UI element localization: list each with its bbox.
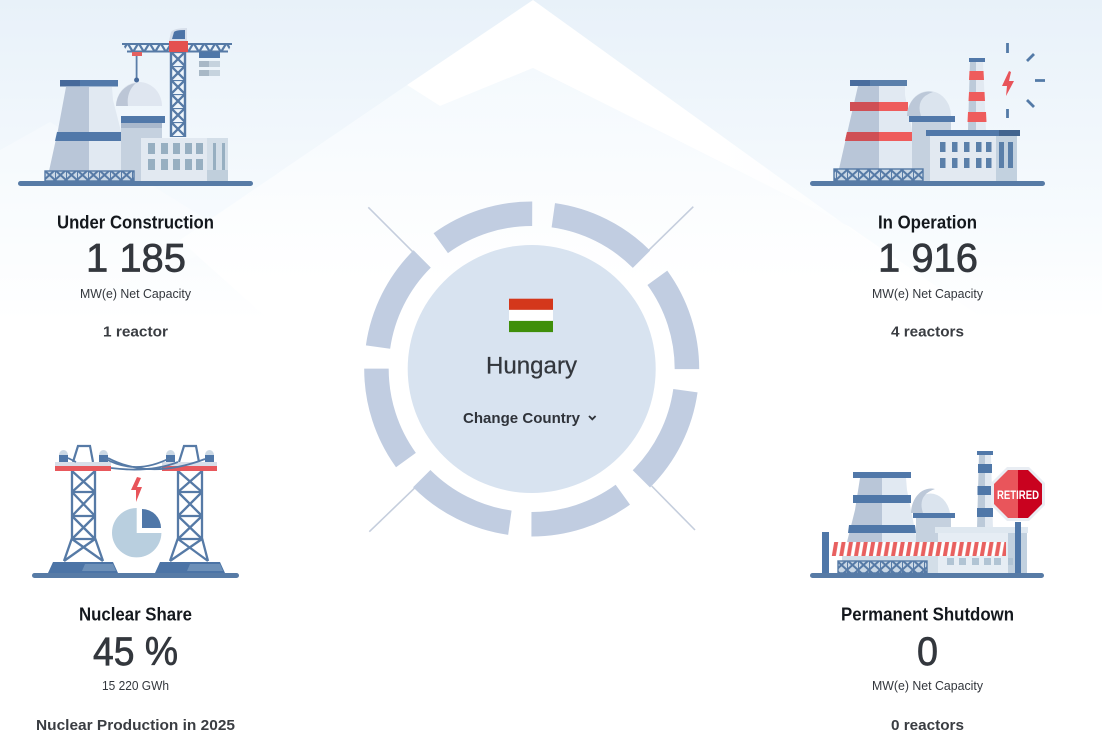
- ground line: [32, 573, 239, 578]
- illustration: plant under construction: [18, 28, 253, 186]
- segmented ring: [356, 194, 707, 544]
- stat: in operation: 4 reactors: [891, 325, 964, 341]
- right pylon: [155, 446, 225, 573]
- power lines: [68, 458, 205, 470]
- chimney: [977, 451, 993, 530]
- illustration: pylons and pie chart: [32, 446, 239, 578]
- illustration: retired plant: [810, 451, 1045, 578]
- cooling tower: [49, 80, 130, 171]
- auxiliary building: [141, 138, 228, 181]
- stat: permanent shutdown: Permanent Shutdown: [841, 604, 1014, 625]
- stat: under construction: 1 reactor: [103, 325, 168, 341]
- stat: permanent shutdown: 0 reactors: [891, 718, 964, 734]
- stat: nuclear share: Nuclear Share: [79, 604, 192, 625]
- center disc: [408, 245, 656, 493]
- retired stop sign: RETIRED: [997, 490, 1039, 502]
- cooling tower: [839, 80, 919, 169]
- stat: nuclear share: [36, 604, 235, 734]
- stat: nuclear share: 15 220 GWh: [102, 679, 169, 693]
- pie chart: [112, 508, 161, 557]
- stat: nuclear share: Nuclear Production in 2025: [36, 718, 235, 734]
- ground line: [18, 181, 253, 186]
- chimney: [968, 58, 986, 130]
- stat: in operation: MW(e) Net Capacity: [872, 287, 984, 301]
- ground line: [810, 181, 1045, 186]
- cooling tower: [847, 472, 917, 542]
- building: [842, 527, 1028, 573]
- stat: in operation: [872, 212, 984, 341]
- stat: in operation: 1 916: [878, 237, 978, 281]
- stat: under construction: MW(e) Net Capacity: [80, 287, 192, 301]
- crane: [122, 28, 232, 137]
- truss base: [834, 169, 923, 181]
- stat: permanent shutdown: MW(e) Net Capacity: [872, 679, 984, 693]
- left pylon: [48, 446, 118, 573]
- icon: lightning bolt: [131, 477, 142, 502]
- stat: in operation: In Operation: [878, 212, 977, 232]
- country name: Hungary: [486, 352, 577, 379]
- stat: nuclear share: 45 %: [93, 630, 178, 674]
- barrier posts: [822, 522, 1021, 573]
- illustration: plant in operation: [810, 43, 1045, 186]
- reactor dome: [116, 82, 165, 181]
- turbine building: [926, 130, 1020, 181]
- ground line: [810, 573, 1044, 578]
- diagonal connector lines: [368, 207, 695, 532]
- stat: under construction: Under Construction: [57, 212, 214, 232]
- truss base: [838, 561, 927, 573]
- stat: under construction: 1 185: [86, 237, 186, 281]
- reactor dome: [911, 488, 955, 542]
- stat: permanent shutdown: 0: [917, 630, 938, 674]
- background mountain shape: [0, 0, 1010, 345]
- stat: under construction: [57, 212, 214, 341]
- reactor dome: [907, 91, 955, 181]
- change country control: Change Country: [463, 410, 581, 427]
- retired stop sign: [991, 467, 1045, 521]
- barrier: [831, 542, 1006, 556]
- truss base: [45, 171, 134, 181]
- flag of Hungary: [509, 299, 553, 332]
- stat: permanent shutdown: [841, 604, 1014, 734]
- background gradient: [0, 0, 1102, 320]
- icon: lightning bolt with rays: [1002, 43, 1045, 118]
